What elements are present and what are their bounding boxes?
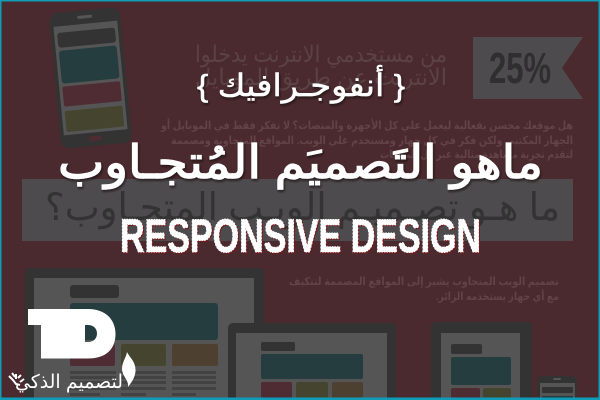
faded description: تصميم الويب المتجاوب يشير إلى المواقع المصممة لتتكيف <box>289 276 559 288</box>
logo <box>9 309 136 393</box>
logo name: لتصميم الذكي <box>15 372 123 393</box>
logo wreath <box>9 373 24 385</box>
title arabic: ماهو التَصميَم المُتجـاوب <box>58 136 543 190</box>
infographic label: { أنفوجـرافيك } <box>197 65 405 104</box>
small phone <box>537 376 577 400</box>
faded heading: من مستخدمي الانترنت يدخلوا <box>195 41 447 68</box>
question band: ما هـو تصـميـم الويـب المتجـاوب؟ <box>45 187 560 230</box>
question band <box>22 179 573 241</box>
faded heading <box>195 41 447 91</box>
ribbon: 25% <box>473 37 583 99</box>
phone illustration <box>49 7 132 149</box>
logo flame <box>122 352 136 387</box>
tablet <box>431 322 532 400</box>
faded heading: الانترنت عن طريق الموبايل <box>195 64 447 91</box>
desktop monitor <box>25 268 264 400</box>
ribbon: 25%: 25% <box>489 44 551 93</box>
logo mark: TD <box>28 309 116 358</box>
faded paragraph <box>160 118 573 161</box>
faded description <box>289 276 559 303</box>
laptop screen <box>228 323 396 400</box>
faded description: مع أي جهاز يستخدمه الزائر. <box>436 289 559 303</box>
